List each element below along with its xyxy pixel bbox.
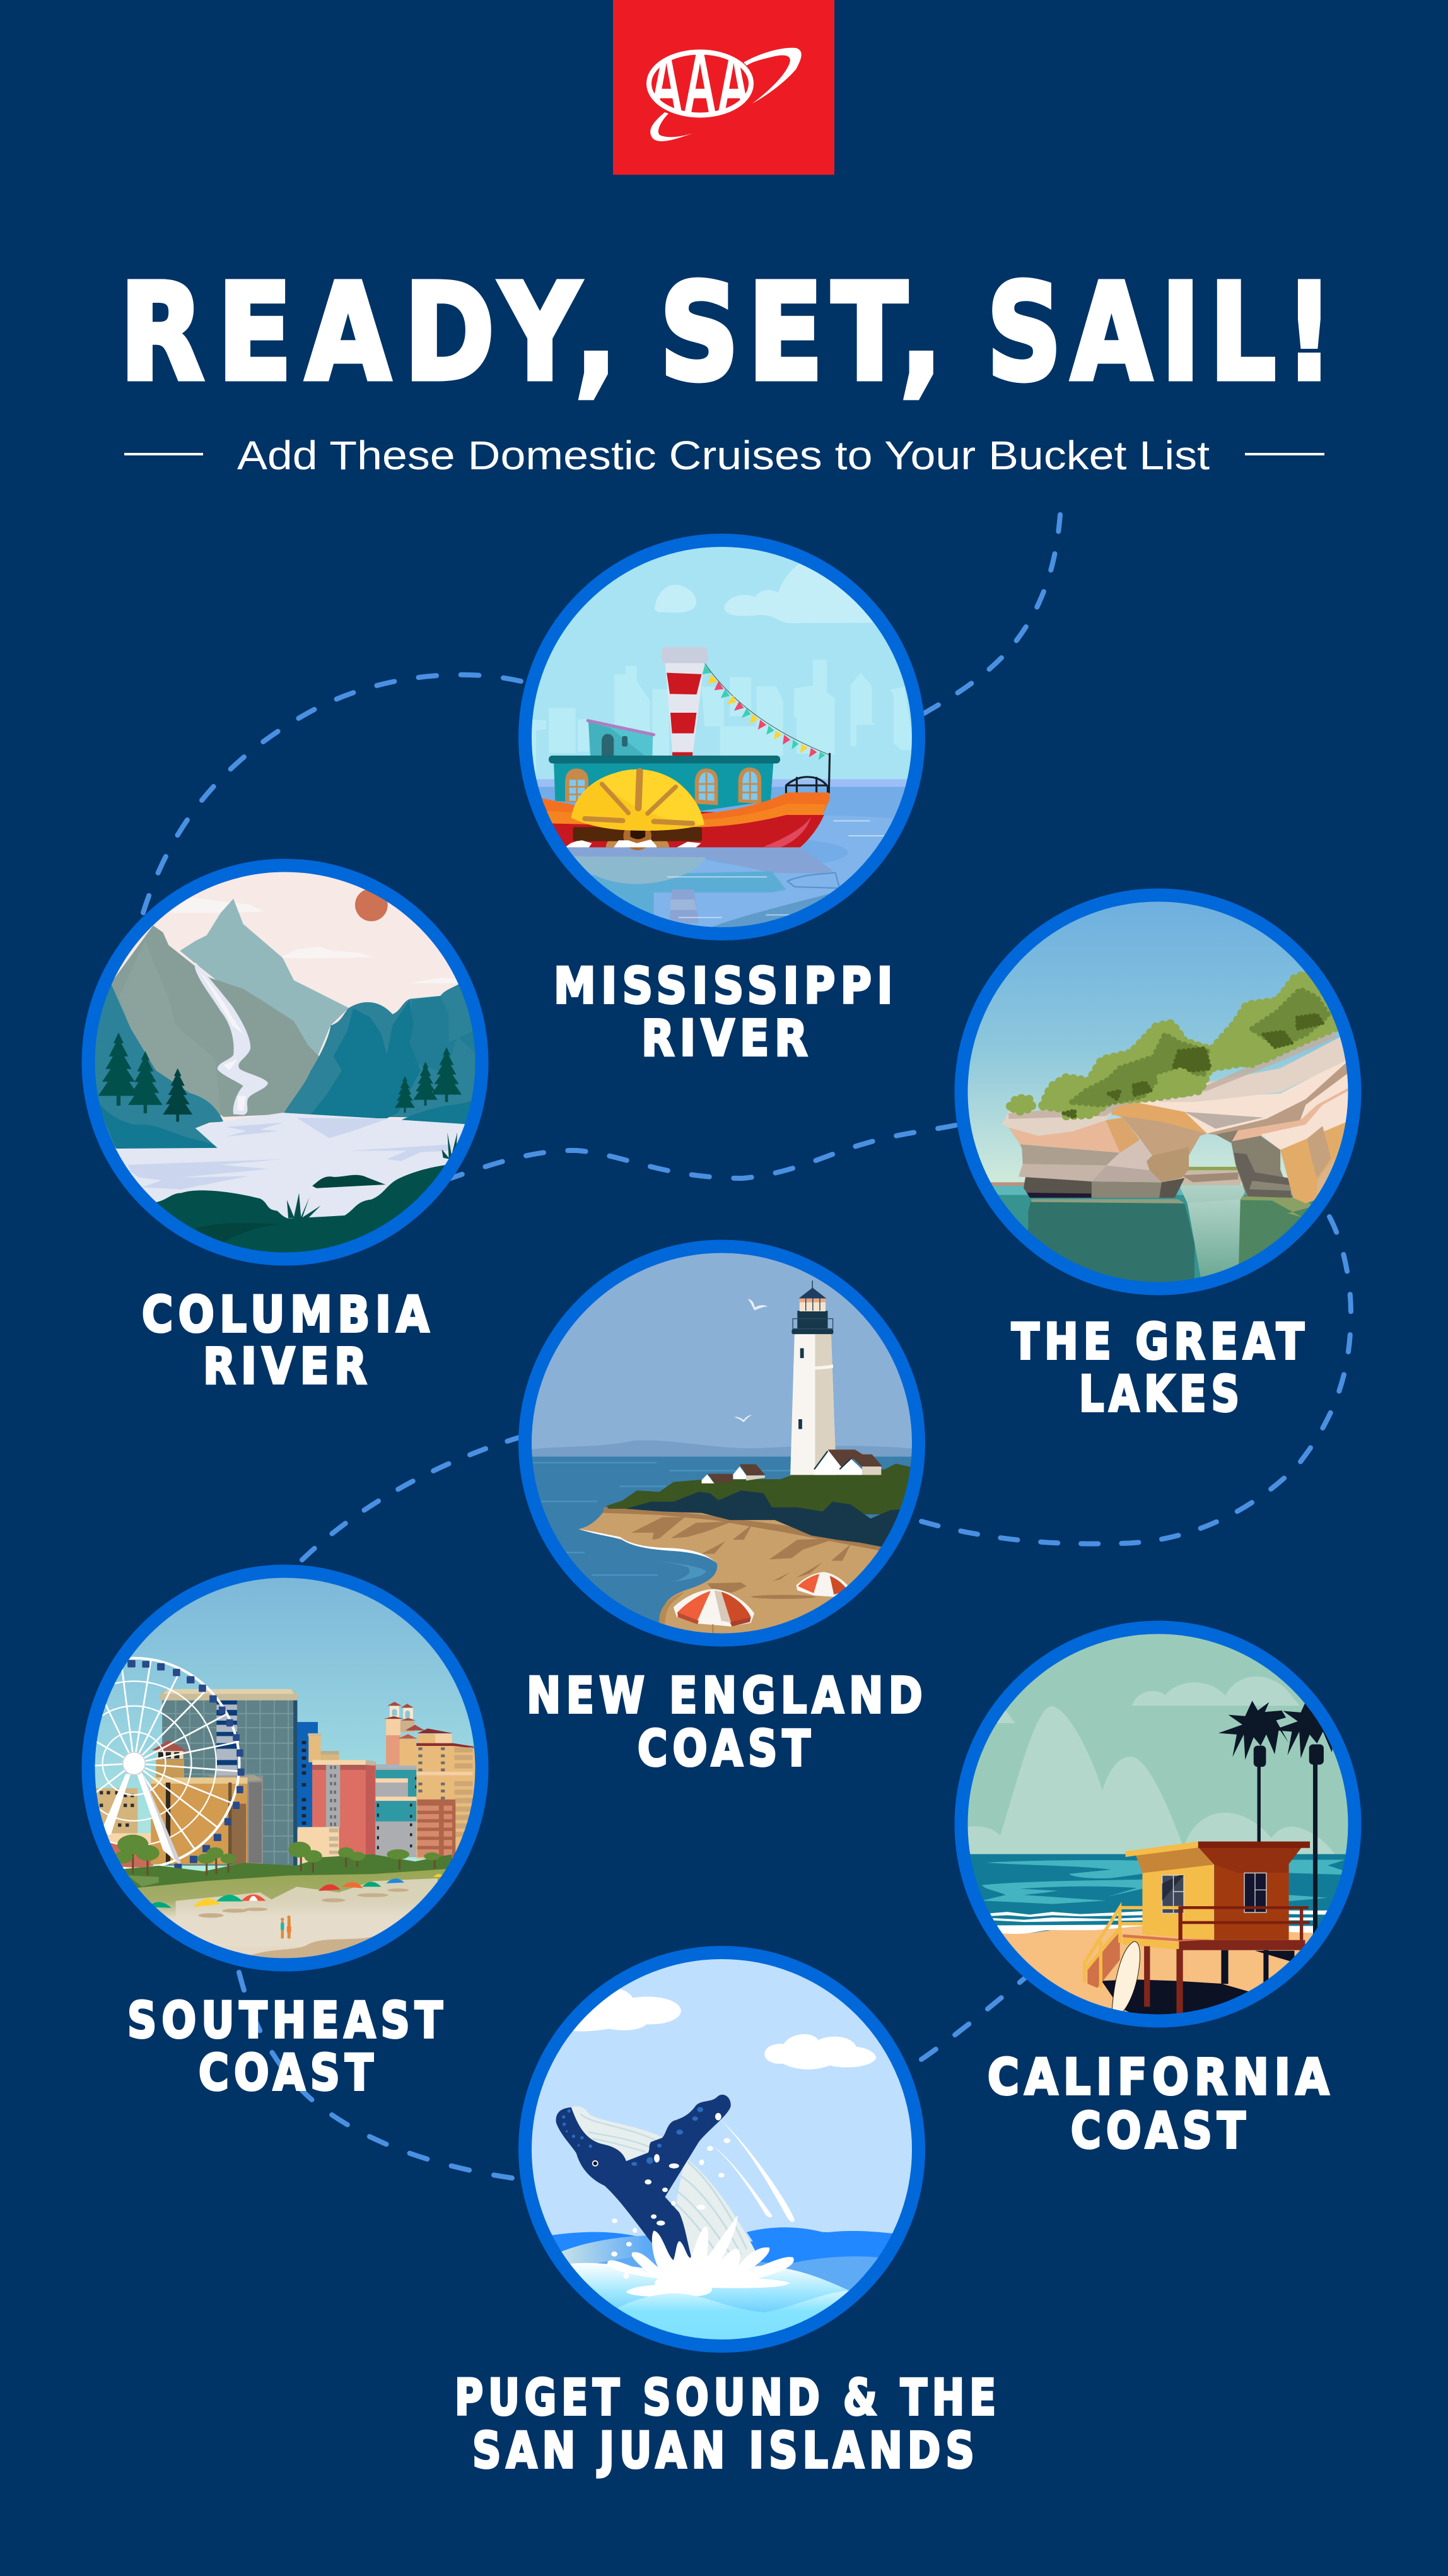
ring — [961, 1627, 1355, 2021]
label: Columbia River: RIVER — [203, 1338, 372, 1395]
greenery — [607, 1464, 921, 1514]
route: dashed line Columbia to Great Lakes — [445, 1125, 955, 1180]
rock shadow under shrubs — [1008, 1030, 1336, 1119]
tower — [1142, 1864, 1214, 1940]
reflection — [565, 847, 832, 874]
palms — [1218, 1696, 1346, 1938]
rock layers — [1024, 1176, 1092, 1198]
label: Mississippi River: RIVER — [641, 1010, 813, 1067]
water — [116, 1113, 465, 1219]
legs — [1144, 1947, 1150, 2007]
panel: Southeast Coast — [29, 1552, 505, 1993]
label: Southeast Coast: COAST — [199, 2045, 378, 2102]
label: Puget Sound & the San Juan Islands — [455, 2370, 1001, 2479]
hotels — [162, 1699, 297, 1866]
distant shore — [1188, 1167, 1237, 1171]
label: The Great Lakes: THE GREAT — [1012, 1314, 1309, 1371]
scene: paddle steamer — [532, 547, 912, 927]
scene: lifeguard tower — [940, 1602, 1381, 2044]
logo: AAA on red tab — [613, 0, 834, 175]
trees — [98, 1033, 462, 1113]
deck — [1123, 1936, 1179, 1950]
ring — [961, 895, 1355, 1289]
title — [120, 255, 1343, 410]
dune and sand — [91, 1865, 480, 1993]
label: Southeast Coast: SOUTHEAST — [127, 1993, 448, 2049]
whale body — [674, 2157, 757, 2266]
label: The Great Lakes: LAKES — [1079, 1366, 1244, 1423]
left hotel — [247, 1776, 263, 1866]
keeper houses — [814, 1449, 841, 1475]
waves — [549, 2227, 899, 2302]
resort towers — [386, 1718, 400, 1764]
title: SAIL! — [987, 255, 1343, 410]
label: Mississippi River: MISSISSIPPI — [554, 958, 898, 1015]
ring — [525, 1246, 918, 1640]
scene: lighthouse — [505, 1230, 946, 1671]
scene: ferris wheel and beach hotels — [29, 1552, 505, 1993]
lighthouse — [790, 1334, 836, 1475]
shrubs — [1010, 974, 1336, 1118]
ring — [525, 1953, 918, 2346]
funnel — [665, 662, 704, 756]
title: READY, — [120, 255, 631, 410]
paddle wheel — [605, 841, 670, 848]
vegetation — [114, 1854, 455, 1888]
logo: AAA on red tab: AAA — [650, 35, 750, 132]
surfboard — [1112, 1941, 1140, 2015]
title: SET, — [660, 255, 951, 410]
label: Puget Sound & the San Juan Islands: SAN JUAN ISLANDS — [472, 2423, 979, 2479]
railings and pole — [786, 777, 828, 793]
label: Puget Sound & the San Juan Islands: PUGET SOUND & THE — [455, 2370, 1001, 2427]
label: The Great Lakes — [1012, 1314, 1309, 1423]
label: Columbia River: COLUMBIA — [142, 1287, 435, 1344]
label: California Coast — [988, 2049, 1334, 2160]
route: dashed line Great Lakes to New England — [921, 1217, 1351, 1544]
panel: Columbia River — [82, 859, 488, 1265]
scene: breaching whale — [505, 1936, 946, 2378]
route: dashed line California to Puget Sound — [921, 1971, 1033, 2059]
main cabin — [554, 763, 773, 811]
upper cabin — [588, 722, 653, 756]
stairs — [1087, 1931, 1120, 1988]
submerged rock — [1028, 1199, 1194, 1282]
bunting — [705, 664, 830, 755]
right side — [1120, 1057, 1353, 1133]
ring — [88, 865, 482, 1259]
cottages — [702, 1464, 765, 1484]
panel: Mississippi River — [518, 534, 925, 940]
scene: mountains and waterfall — [95, 872, 476, 1253]
panel: New England Coast — [505, 1230, 946, 1671]
splash — [607, 2215, 794, 2297]
route: dashed line Southeast to Puget Sound — [239, 1972, 512, 2178]
water streams and drops — [607, 2113, 795, 2297]
panel: California Coast — [940, 1602, 1381, 2044]
beach — [578, 1508, 921, 1653]
beach umbrellas — [148, 1902, 172, 1908]
umbrellas — [674, 1572, 854, 1634]
label: California Coast: CALIFORNIA — [988, 2049, 1334, 2106]
ring — [88, 1571, 482, 1965]
route: dashed line from top to Mississippi — [924, 515, 1060, 713]
ferris wheel — [29, 1658, 239, 1869]
hull — [533, 805, 824, 847]
label: Mississippi River — [554, 958, 898, 1067]
route: dashed line New England to Southeast — [302, 1436, 523, 1560]
gulls — [747, 1299, 768, 1310]
sand — [996, 1926, 1334, 2044]
label: California Coast: COAST — [1071, 2103, 1251, 2160]
subtitle: Add These Domestic Cruises to Your Bucket List — [237, 433, 1210, 478]
label: New England Coast: COAST — [638, 1721, 815, 1777]
ring — [525, 540, 918, 934]
route: dashed line Mississippi to Columbia — [143, 675, 521, 913]
panel: Puget Sound & the San Juan Islands — [505, 1936, 946, 2378]
clouds — [572, 1989, 876, 2070]
panel: The Great Lakes — [940, 877, 1381, 1291]
label: New England Coast — [527, 1668, 928, 1777]
label: Southeast Coast — [127, 1993, 448, 2102]
front wave — [617, 2291, 850, 2359]
label: New England Coast: NEW ENGLAND — [527, 1668, 928, 1724]
foreground — [312, 1175, 385, 1188]
scene: sandstone arch — [967, 902, 1348, 1282]
label: Columbia River — [142, 1287, 435, 1395]
waterfall — [195, 962, 268, 1115]
